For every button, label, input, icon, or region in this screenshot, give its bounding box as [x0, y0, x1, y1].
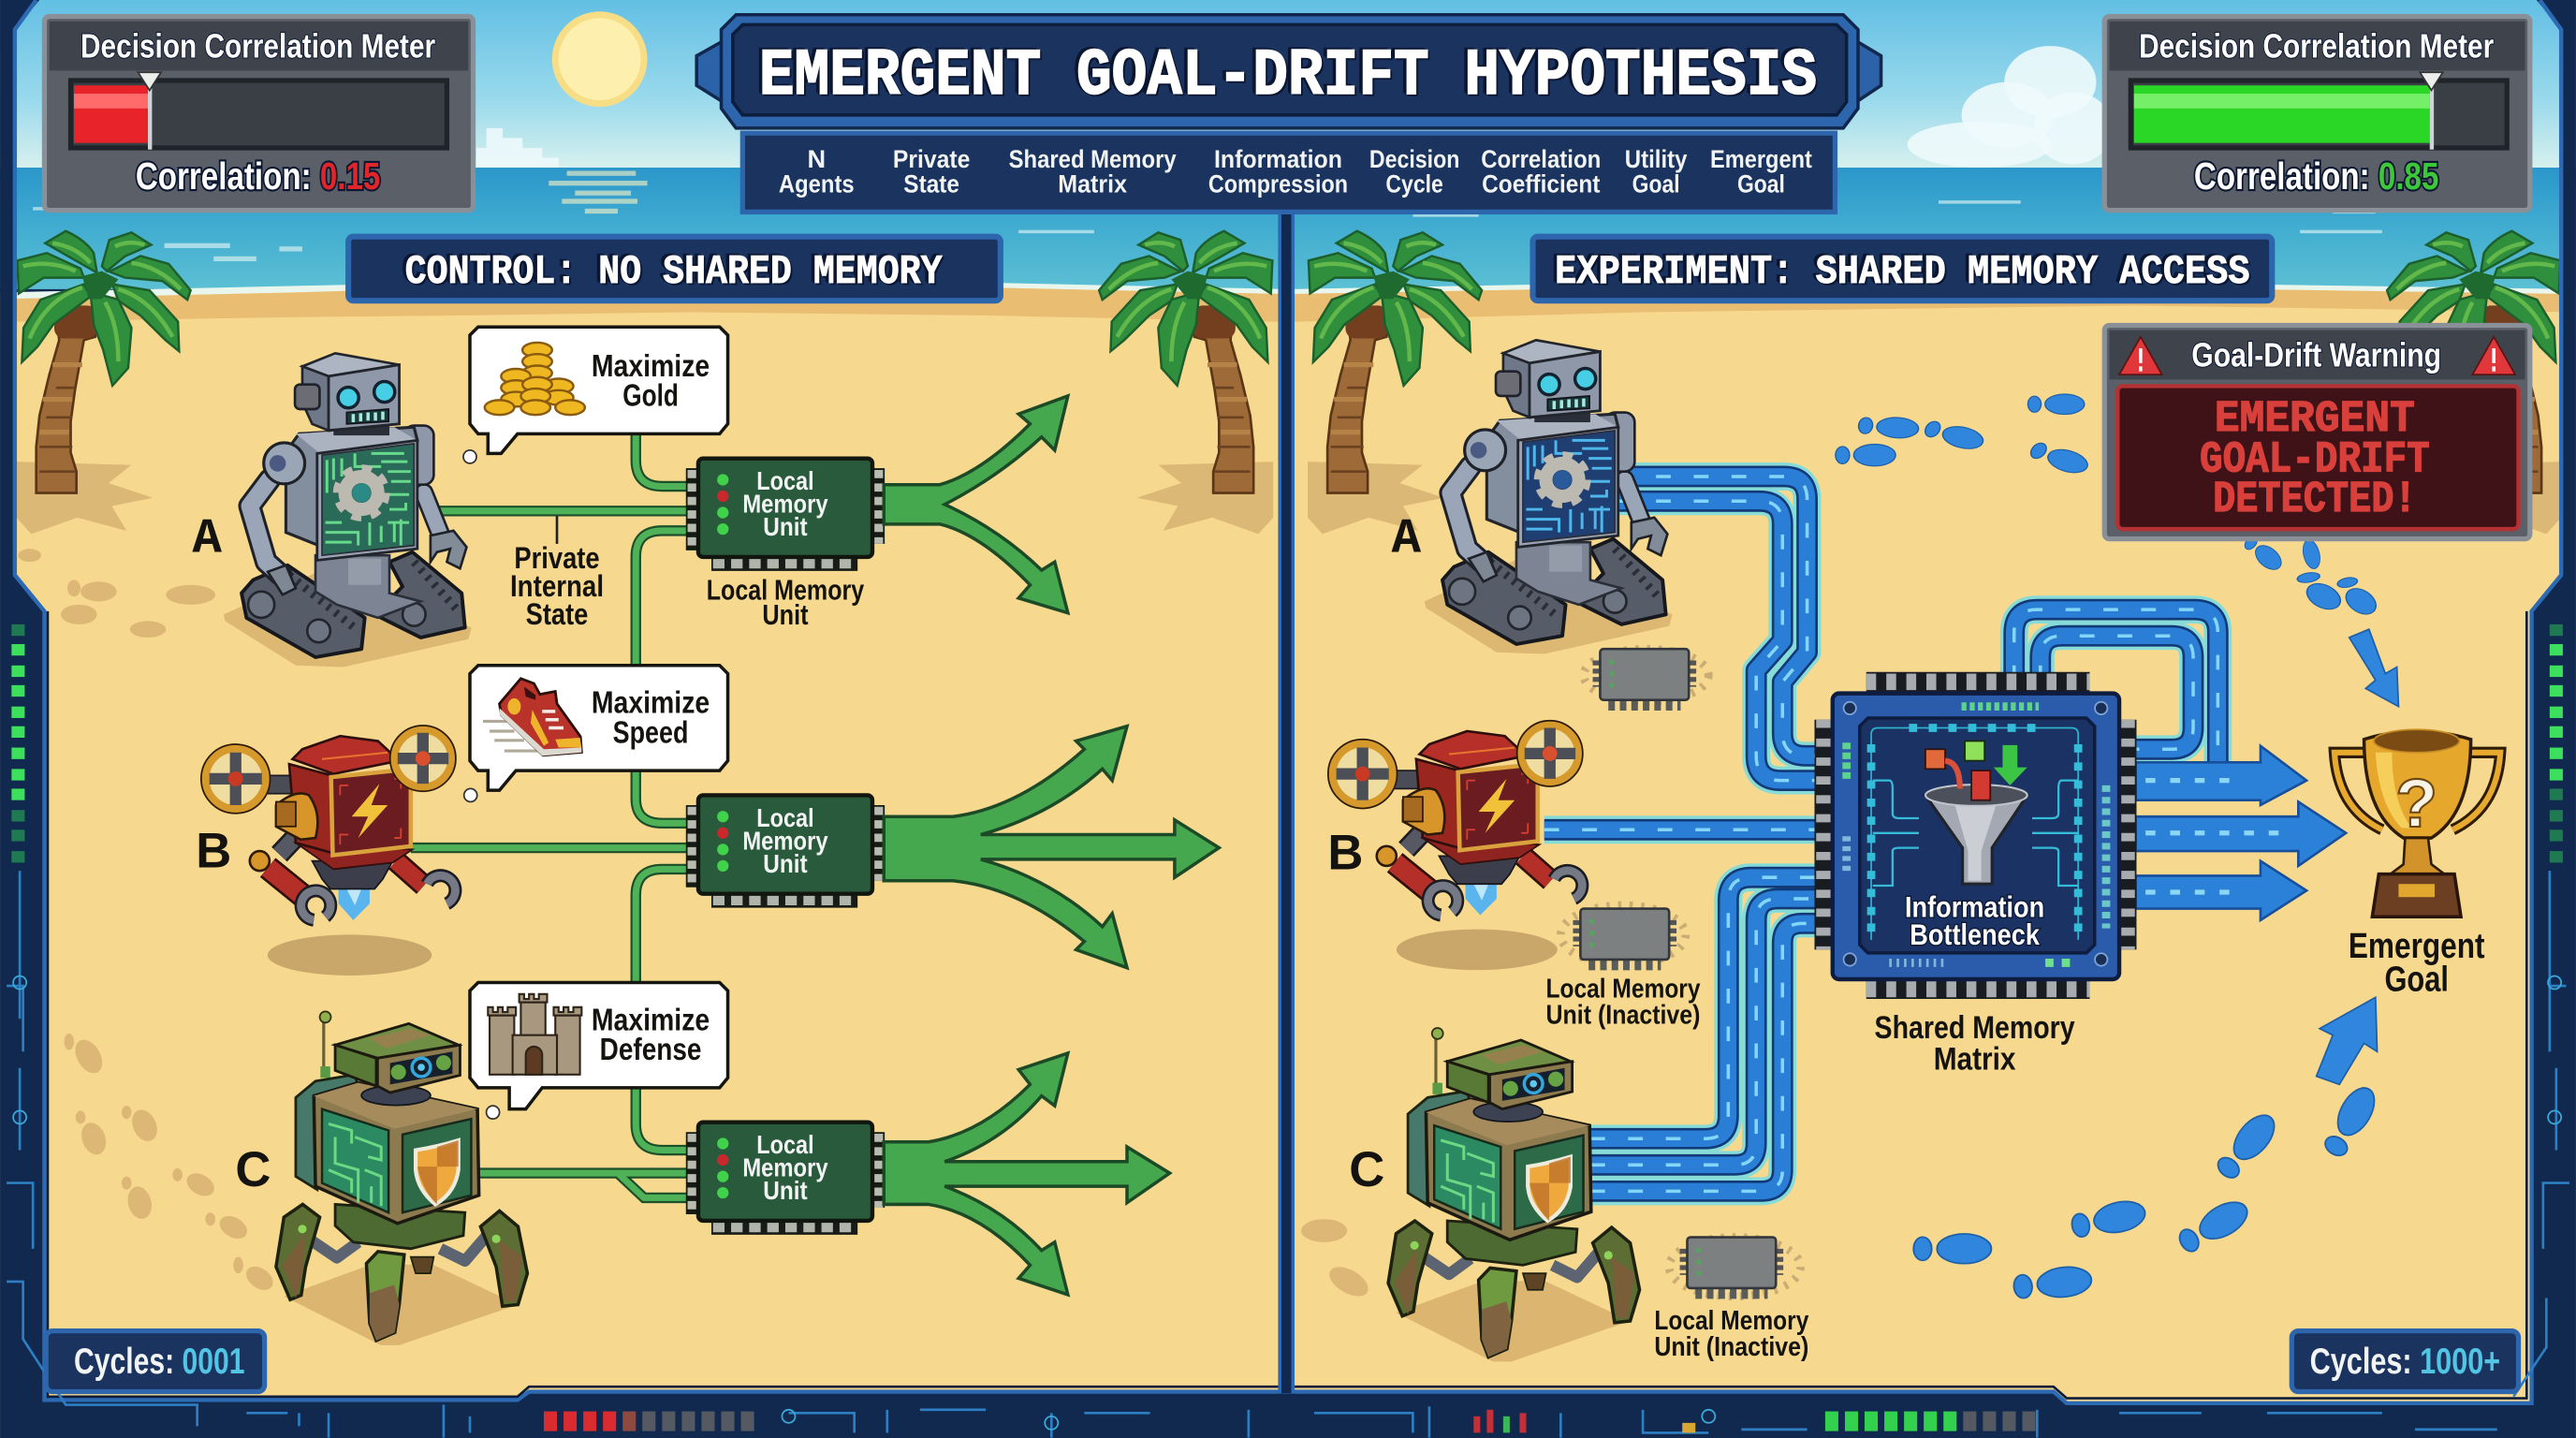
section banner: experiment	[1532, 237, 2272, 301]
arrows: agent C diverging actions	[884, 1053, 1170, 1295]
agent labels	[192, 511, 1422, 1197]
glossary panel: N	[807, 144, 826, 173]
meter: control: Decision Correlation Meter	[80, 26, 435, 65]
warning panel: EMERGENT	[2215, 395, 2415, 445]
warning panel	[2104, 325, 2530, 539]
arrow: footprints down to goal	[2349, 629, 2398, 707]
glossary panel: Shared Memory	[1009, 144, 1177, 173]
tick for private internal state	[556, 516, 558, 544]
icon: gold coins	[485, 343, 585, 415]
speech bubble: maximize speed	[464, 666, 728, 801]
shadow under drone robots	[268, 930, 1558, 976]
shared memory matrix chip: Information	[1905, 889, 2044, 923]
agent labels: C	[235, 1142, 271, 1197]
speech bubble: maximize gold: Maximize	[592, 349, 710, 384]
glossary panel: Private	[893, 144, 970, 173]
local memory unit C: Memory	[742, 1153, 828, 1182]
meter: experiment: Correlation: 0.85	[2194, 154, 2438, 198]
robot A, control	[224, 353, 472, 668]
speech bubble: maximize speed: Speed	[613, 715, 688, 750]
green wires: control panel	[411, 433, 690, 1197]
glossary panel: Goal	[1632, 169, 1680, 198]
status lights: left rail	[11, 624, 24, 862]
robot A, experiment	[1425, 340, 1673, 654]
cycle counter: control: Cycles: 0001	[74, 1342, 245, 1382]
local memory unit B: Memory	[742, 826, 828, 855]
speech bubble: maximize speed: Maximize	[592, 686, 710, 721]
label: inactive unit B: Local Memory	[1546, 974, 1701, 1004]
warning panel: DETECTED!	[2213, 476, 2417, 525]
palm trees	[17, 231, 2561, 534]
local memory unit A: Unit	[763, 512, 808, 541]
meter: experiment: Decision Correlation Meter	[2139, 26, 2494, 65]
glossary panel: Emergent	[1710, 144, 1812, 173]
status lights: bottom right	[1825, 1412, 2036, 1431]
section banner: control	[348, 237, 1001, 301]
title panel: EMERGENT GOAL-DRIFT HYPOTHESIS	[759, 40, 1817, 114]
glossary panel: Information	[1214, 144, 1342, 173]
local memory unit C: Unit	[763, 1176, 808, 1205]
label: inactive unit C	[1654, 1306, 1808, 1362]
glossary panel: Correlation	[1481, 144, 1601, 173]
arrow: footprints up to goal	[2317, 997, 2378, 1084]
inactive memory chips	[1560, 649, 1801, 1297]
glossary panel	[742, 133, 1835, 212]
glossary panel: Goal	[1737, 169, 1785, 198]
cycle counter: control	[46, 1331, 265, 1392]
glossary panel: Coefficient	[1482, 169, 1600, 198]
glossary panel: Utility	[1625, 144, 1687, 173]
icon: warning triangles	[2119, 337, 2515, 374]
local memory unit B: Unit	[763, 849, 808, 878]
label: emergent goal	[2349, 926, 2485, 998]
arrows: agent A diverging actions	[884, 396, 1068, 613]
label: local memory unit: Local Memory	[707, 574, 864, 607]
label: private internal state	[510, 541, 604, 631]
trophy: emergent goal	[2334, 729, 2500, 917]
robot B, control	[201, 726, 456, 920]
speech bubble: maximize gold	[463, 327, 728, 463]
meter: experiment	[2104, 17, 2530, 211]
meter: control: Correlation: 0.15	[136, 154, 380, 198]
icon: running shoe	[483, 679, 581, 756]
label: shared memory matrix: Shared Memory	[1875, 1010, 2075, 1046]
local memory unit C	[693, 1123, 878, 1227]
trophy: emergent goal: ?	[2395, 764, 2437, 842]
cycle counter: experiment: Cycles: 1000+	[2310, 1342, 2500, 1382]
local memory unit A	[693, 459, 878, 564]
local memory unit B: Local	[756, 803, 814, 832]
label: local memory unit: Unit	[762, 598, 809, 631]
glossary panel: Compression	[1208, 169, 1348, 198]
section banner: experiment: EXPERIMENT: SHARED MEMORY ACCESS	[1555, 249, 2250, 296]
label: shared memory matrix	[1875, 1010, 2075, 1078]
cycle counter: experiment	[2291, 1331, 2519, 1392]
label: emergent goal: Emergent	[2349, 926, 2485, 965]
glossary panel: Cycle	[1385, 169, 1443, 198]
local memory unit A: Local	[756, 466, 814, 495]
shared memory tubes	[1544, 477, 2217, 1191]
arrows: shared memory output	[2136, 746, 2346, 920]
label: private internal state: Private	[514, 541, 600, 575]
agent labels: B	[1327, 825, 1363, 880]
status ticks: bottom centre	[1473, 1410, 1695, 1432]
glossary panel: State	[903, 169, 959, 198]
status lights: bottom left	[544, 1412, 754, 1431]
glossary panel: Agents	[779, 169, 855, 198]
label: inactive unit C: Unit (Inactive)	[1654, 1332, 1808, 1362]
local memory unit C: Local	[756, 1130, 814, 1159]
icon: castle	[488, 994, 581, 1075]
clouds	[476, 46, 2113, 168]
arrows: agent B diverging actions	[884, 726, 1219, 968]
speech bubble: maximize defense: Defense	[600, 1033, 701, 1067]
glossary panel: Matrix	[1058, 169, 1127, 198]
sun	[552, 11, 648, 107]
speech bubble: maximize defense: Maximize	[592, 1003, 710, 1037]
label: private internal state: State	[526, 597, 588, 631]
label: inactive unit B: Unit (Inactive)	[1546, 1000, 1701, 1030]
label: local memory unit	[707, 574, 864, 631]
glossary panel: Decision	[1369, 144, 1459, 173]
local memory unit A: Memory	[742, 490, 828, 519]
label: emergent goal: Goal	[2384, 959, 2449, 998]
centre divider	[1278, 212, 1295, 1393]
agent labels: A	[192, 511, 222, 567]
shared memory matrix chip: Bottleneck	[1910, 917, 2040, 951]
footprints: control side	[18, 549, 277, 1295]
agent labels: C	[1349, 1142, 1384, 1197]
speech bubble: maximize gold: Gold	[622, 378, 679, 413]
footprints: experiment side, faded	[1301, 1219, 1373, 1302]
warning panel: GOAL-DRIFT	[2200, 436, 2430, 486]
local memory unit B	[693, 795, 878, 901]
agent labels: A	[1392, 511, 1422, 567]
title panel	[696, 15, 1881, 128]
label: shared memory matrix: Matrix	[1934, 1042, 2015, 1078]
speech bubble: maximize defense	[470, 983, 728, 1119]
section banner: control: CONTROL: NO SHARED MEMORY	[405, 249, 943, 296]
agent labels: B	[196, 824, 231, 879]
meter: control	[44, 17, 474, 211]
label: inactive unit B	[1546, 974, 1701, 1030]
label: private internal state: Internal	[510, 569, 604, 603]
robot B, experiment	[1328, 721, 1583, 916]
label: inactive unit C: Local Memory	[1654, 1306, 1808, 1336]
shared memory matrix chip	[1823, 682, 2128, 990]
blue footprints	[1836, 394, 2398, 1302]
warning panel: Goal-Drift Warning	[2191, 335, 2441, 374]
robot C, control	[276, 1011, 527, 1345]
robot C, experiment	[1388, 1028, 1640, 1361]
status lights: right rail	[2550, 624, 2563, 862]
